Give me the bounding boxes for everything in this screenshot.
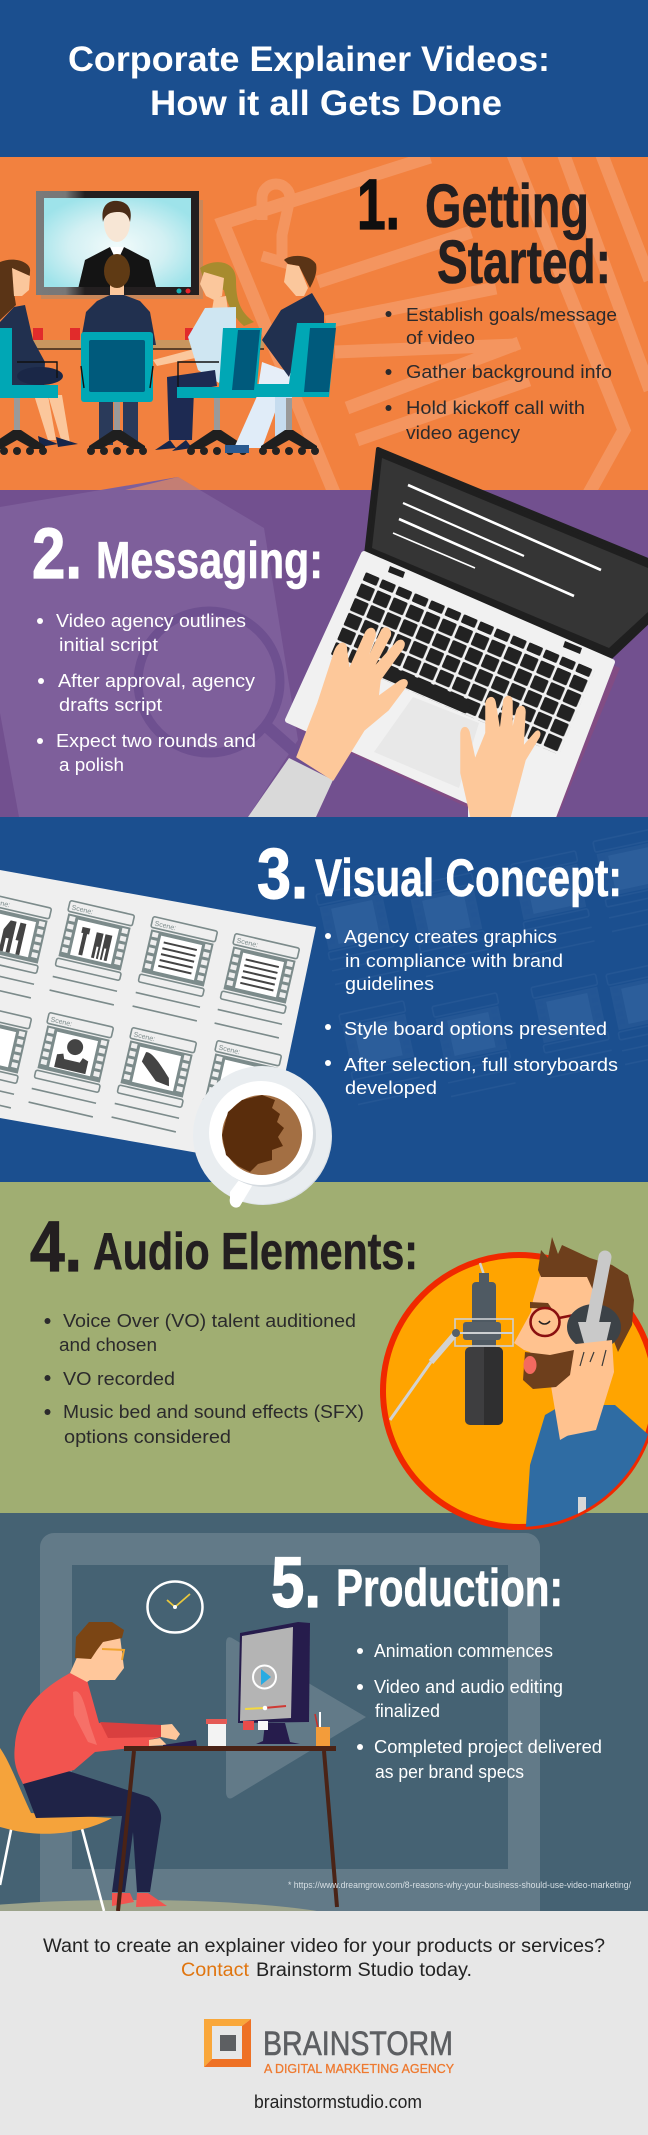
heading: 1 Getting Started	[357, 166, 611, 296]
storyboard card 4: Scene:	[236, 938, 259, 949]
icon: wall monitor	[36, 191, 203, 299]
panel: step 1 getting started	[0, 150, 648, 495]
text block: step 5 bullets: Animation commences	[374, 1640, 553, 1661]
storyboard sheet	[0, 870, 316, 1165]
desk	[118, 1746, 337, 1911]
storyboard card 3	[133, 916, 218, 1021]
heading: 2 Messaging: 2.	[32, 515, 82, 594]
heading: 1 Getting Started: Getting	[425, 172, 589, 240]
coffee cup	[206, 1719, 227, 1746]
text block: step 1 bullets	[386, 304, 617, 443]
text block: step 1 bullets: of video	[406, 327, 475, 348]
heading: 2 Messaging	[32, 515, 323, 594]
call to action text: Contact	[181, 1960, 250, 1981]
storyboard card 5	[0, 1003, 32, 1108]
text block: step 4 bullets	[44, 1310, 364, 1447]
panel: step 3 visual concept	[0, 817, 648, 1208]
icon: microphone	[390, 1263, 513, 1425]
text block: step 3 bullets: After selection, full storyboards	[344, 1054, 618, 1075]
storyboard card 6: Scene:	[50, 1017, 73, 1028]
hand	[555, 1340, 614, 1436]
text block: step 4 bullets: VO recorded	[63, 1368, 175, 1389]
text block: step 2 bullets: drafts script	[59, 694, 162, 715]
headphones	[567, 1304, 621, 1350]
brainstorm logo: BRAINSTORM	[263, 2025, 453, 2063]
pants	[23, 1769, 161, 1892]
head	[70, 1636, 124, 1682]
storyboard card 7: Scene:	[133, 1032, 156, 1043]
shirt	[14, 1673, 161, 1784]
heading: 5 Production: 5.	[271, 1544, 321, 1623]
chair	[0, 1748, 112, 1911]
panel: step 4 audio elements	[0, 1182, 648, 1540]
call to action text: Brainstorm Studio today.	[256, 1960, 472, 1981]
head	[514, 1237, 634, 1395]
panel: title banner	[0, 0, 648, 157]
touchpad	[374, 697, 479, 788]
text block: step 3 bullets: Agency creates graphics	[344, 926, 557, 947]
text block: step 5 bullets	[357, 1640, 602, 1782]
text block: step 3 bullets: in compliance with brand	[345, 950, 563, 971]
text block: step 1 bullets: Hold kickoff call with	[406, 397, 585, 418]
panel: step 2 messaging	[0, 449, 648, 825]
storyboard card 1	[0, 893, 52, 998]
pencil cup	[315, 1712, 330, 1746]
heading: 2 Messaging: Messaging:	[96, 532, 323, 590]
heading: 4 Audio Elements	[30, 1208, 418, 1287]
background clipboard pattern	[223, 150, 648, 495]
keyboard	[163, 1740, 197, 1746]
heading: 4 Audio Elements: Audio Elements:	[93, 1223, 418, 1281]
call to action text: Want to create an explainer video for your products or services?	[43, 1936, 605, 1957]
storyboard card 2	[50, 900, 135, 1005]
heading: 5 Production	[271, 1544, 563, 1623]
background video frame and play shape	[0, 1533, 540, 1911]
shoes	[112, 1893, 167, 1907]
text block: step 2 bullets	[37, 610, 256, 775]
orange circle	[383, 1255, 648, 1527]
left hand	[297, 628, 407, 780]
person: man on right	[225, 256, 336, 455]
storyboard card 8	[197, 1040, 282, 1145]
storyboard card 3: Scene:	[154, 921, 177, 932]
neck	[550, 1370, 595, 1440]
text block: step 5 bullets: as per brand specs	[375, 1761, 524, 1782]
website url: brainstormstudio.com	[254, 2092, 422, 2112]
text block: step 2 bullets: Expect two rounds and	[56, 730, 256, 751]
person: woman on left	[0, 260, 78, 455]
text block: step 2 bullets: Video agency outlines	[56, 610, 246, 631]
brainstorm logo	[204, 2019, 455, 2076]
heading: 3 Visual Concept	[257, 835, 622, 914]
text block: step 5 bullets: Video and audio editing	[374, 1676, 563, 1697]
text block: step 5 bullets: finalized	[375, 1700, 440, 1721]
heading: 5 Production: Production:	[336, 1559, 563, 1618]
storyboard card 7	[112, 1027, 197, 1132]
text block: step 1 bullets: Gather background info	[406, 361, 612, 382]
call to action text	[43, 1936, 605, 1981]
panel: step 5 production	[0, 1513, 648, 1954]
text block: step 4 bullets: options considered	[64, 1426, 231, 1447]
storyboard card 4	[215, 933, 300, 1038]
icon: monitor with play button	[238, 1622, 310, 1744]
title	[68, 39, 550, 123]
person: man from behind	[81, 254, 156, 455]
person: woman on right	[153, 262, 262, 455]
hands	[149, 1724, 180, 1746]
shirt	[525, 1405, 648, 1540]
text block: step 4 bullets: Voice Over (VO) talent auditioned	[63, 1310, 356, 1331]
icon: coffee cup	[193, 1066, 332, 1208]
illustration: video conference meeting	[0, 191, 336, 455]
text block: step 3 bullets	[325, 926, 618, 1098]
icon: laptop with typing hands	[248, 449, 648, 825]
right hand	[461, 696, 540, 817]
background ghost storyboards	[316, 828, 648, 1105]
heading: 3 Visual Concept: 3.	[257, 835, 308, 914]
title: Corporate Explainer Videos:	[68, 39, 550, 79]
keyboard	[330, 572, 595, 755]
title: How it all Gets Done	[150, 83, 502, 123]
text block: step 2 bullets: a polish	[59, 754, 124, 775]
text block: step 2 bullets: initial script	[59, 634, 158, 655]
text block: step 1 bullets: video agency	[406, 422, 521, 443]
sleeve	[248, 758, 333, 817]
text block: step 2 bullets: After approval, agency	[58, 670, 256, 691]
text block: step 1 bullets: Establish goals/message	[406, 304, 617, 325]
background paper and magnifier	[0, 477, 310, 817]
text block: step 3 bullets: developed	[345, 1077, 437, 1098]
storyboard card 6	[29, 1012, 114, 1117]
heading: 1 Getting Started: 1.	[357, 166, 400, 245]
storyboard card 8: Scene:	[218, 1045, 241, 1056]
brainstorm logo: A DIGITAL MARKETING AGENCY	[264, 2062, 455, 2076]
illustration: man at desk	[0, 1622, 337, 1911]
text block: step 4 bullets: and chosen	[59, 1334, 157, 1355]
icon: wall clock	[148, 1582, 202, 1632]
panel: footer call to action	[0, 1911, 648, 2135]
storyboard card 2: Scene:	[71, 905, 94, 916]
illustration: voice-over singer at microphone	[383, 1237, 648, 1540]
text block: step 3 bullets: Style board options presented	[344, 1018, 607, 1039]
heading: 4 Audio Elements: 4.	[30, 1208, 82, 1287]
text block: step 4 bullets: Music bed and sound effects (SFX)	[63, 1401, 364, 1422]
text block: step 3 bullets: guidelines	[345, 973, 434, 994]
text block: step 5 bullets: Completed project delivered	[374, 1736, 602, 1757]
table with mugs	[33, 328, 280, 350]
